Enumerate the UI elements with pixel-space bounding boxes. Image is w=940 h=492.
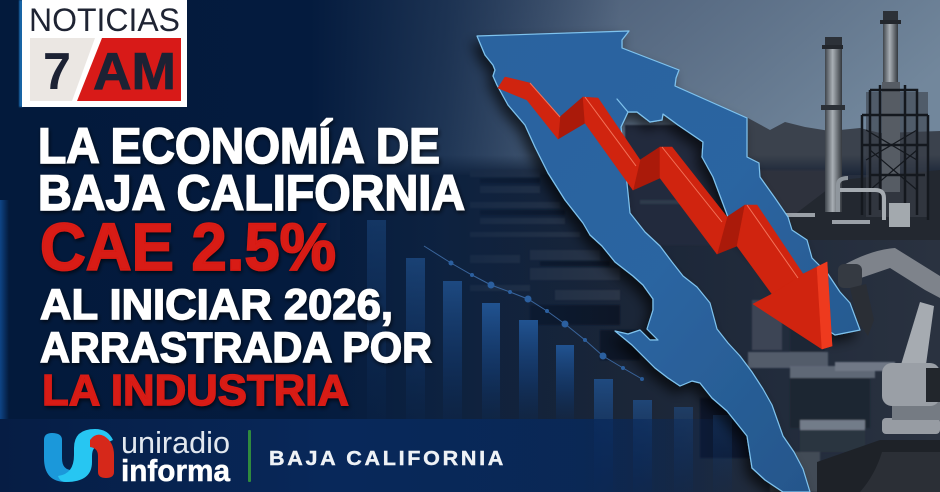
arrow main segments [498, 77, 832, 349]
headline: LA ECONOMÍA DE [38, 118, 440, 174]
brand wordmark: informa [121, 453, 231, 488]
brand wordmark: uniradio [121, 425, 230, 460]
headline: ARRASTRADA POR [40, 324, 432, 372]
left edge blue glow [0, 200, 9, 419]
headline: LA INDUSTRIA [42, 366, 349, 415]
headline [38, 118, 465, 415]
map of Baja California [477, 31, 860, 492]
robot arm [817, 248, 940, 492]
headline: AL INICIAR 2026, [40, 281, 393, 329]
logo: Noticias 7 AM: 7 [43, 43, 71, 101]
background sky [0, 0, 940, 240]
logo: Noticias 7 AM: AM [93, 43, 176, 101]
refinery with smokestacks [786, 11, 940, 240]
logo: Uniradio Informa mark [44, 429, 114, 482]
arrow notch faces [558, 97, 745, 254]
headline: CAE 2.5% [40, 210, 336, 285]
background mountains [720, 108, 940, 190]
red falling arrow [498, 77, 832, 349]
logo: Noticias 7 AM: NOTICIAS [29, 2, 180, 38]
arrow head bright side [817, 262, 832, 349]
footer location label: BAJA CALIFORNIA [269, 448, 506, 470]
footer band [0, 419, 940, 492]
bar chart background [367, 220, 732, 492]
left navy fade [0, 0, 620, 492]
background city [340, 125, 940, 492]
trend line with dots [424, 246, 644, 381]
brand wordmark [121, 425, 231, 488]
arrow highlight [530, 83, 798, 278]
headline: BAJA CALIFORNIA [38, 165, 465, 221]
logo: Noticias 7 AM [19, 0, 187, 107]
footer divider [248, 430, 251, 482]
